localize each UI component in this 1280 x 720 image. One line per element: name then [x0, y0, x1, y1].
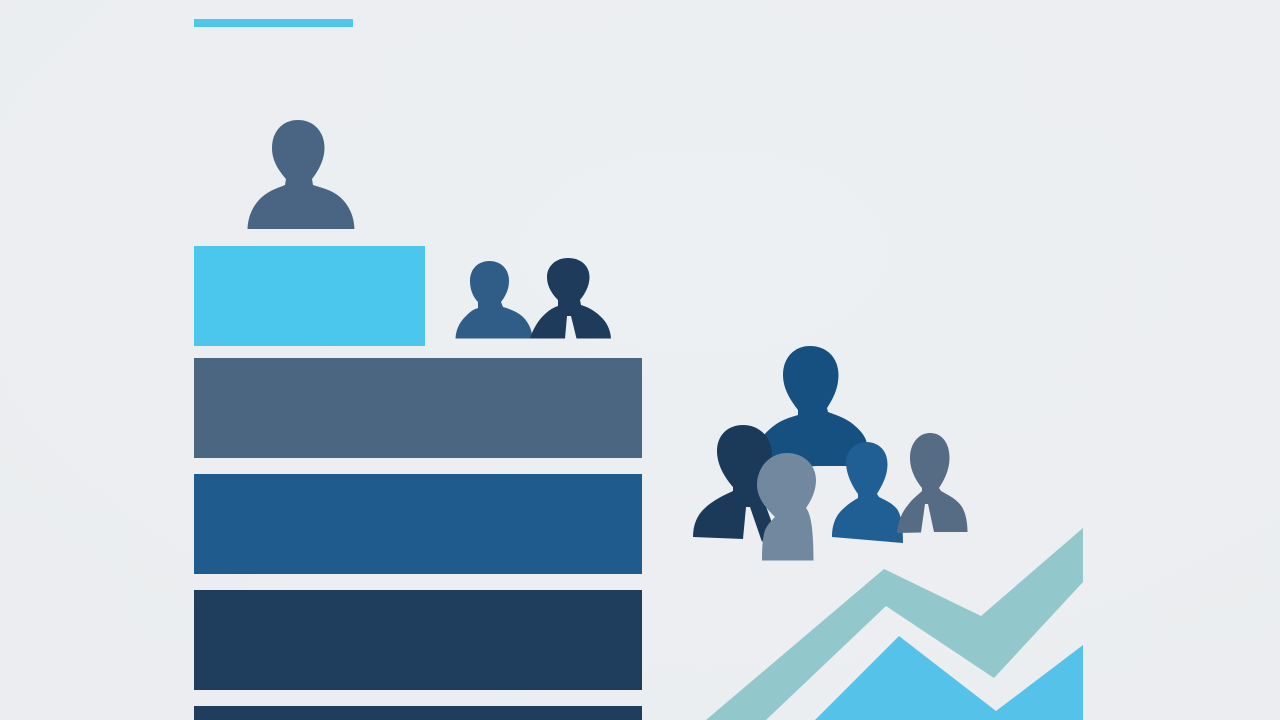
icon: front light person: [757, 453, 816, 560]
accent bar: [194, 19, 353, 27]
bar: blue: [194, 474, 642, 574]
bar: cyan block: [194, 246, 425, 346]
icon: left person: [693, 425, 772, 542]
icon: top person: [248, 120, 354, 229]
icon: back centre person: [764, 346, 867, 468]
icon: left person of pair: [456, 261, 532, 338]
icon: right person of pair: [530, 258, 611, 338]
chart: teal trend line: [706, 528, 1083, 720]
bar: slate: [194, 358, 642, 458]
bar: navy lower: [194, 706, 642, 720]
chart: cyan area: [815, 636, 1083, 720]
icon: right blue person: [832, 442, 903, 543]
icon: pair of people: [456, 258, 611, 338]
bar: navy: [194, 590, 642, 690]
icon: group of people: [693, 346, 968, 560]
icon: right grey person: [897, 433, 968, 533]
